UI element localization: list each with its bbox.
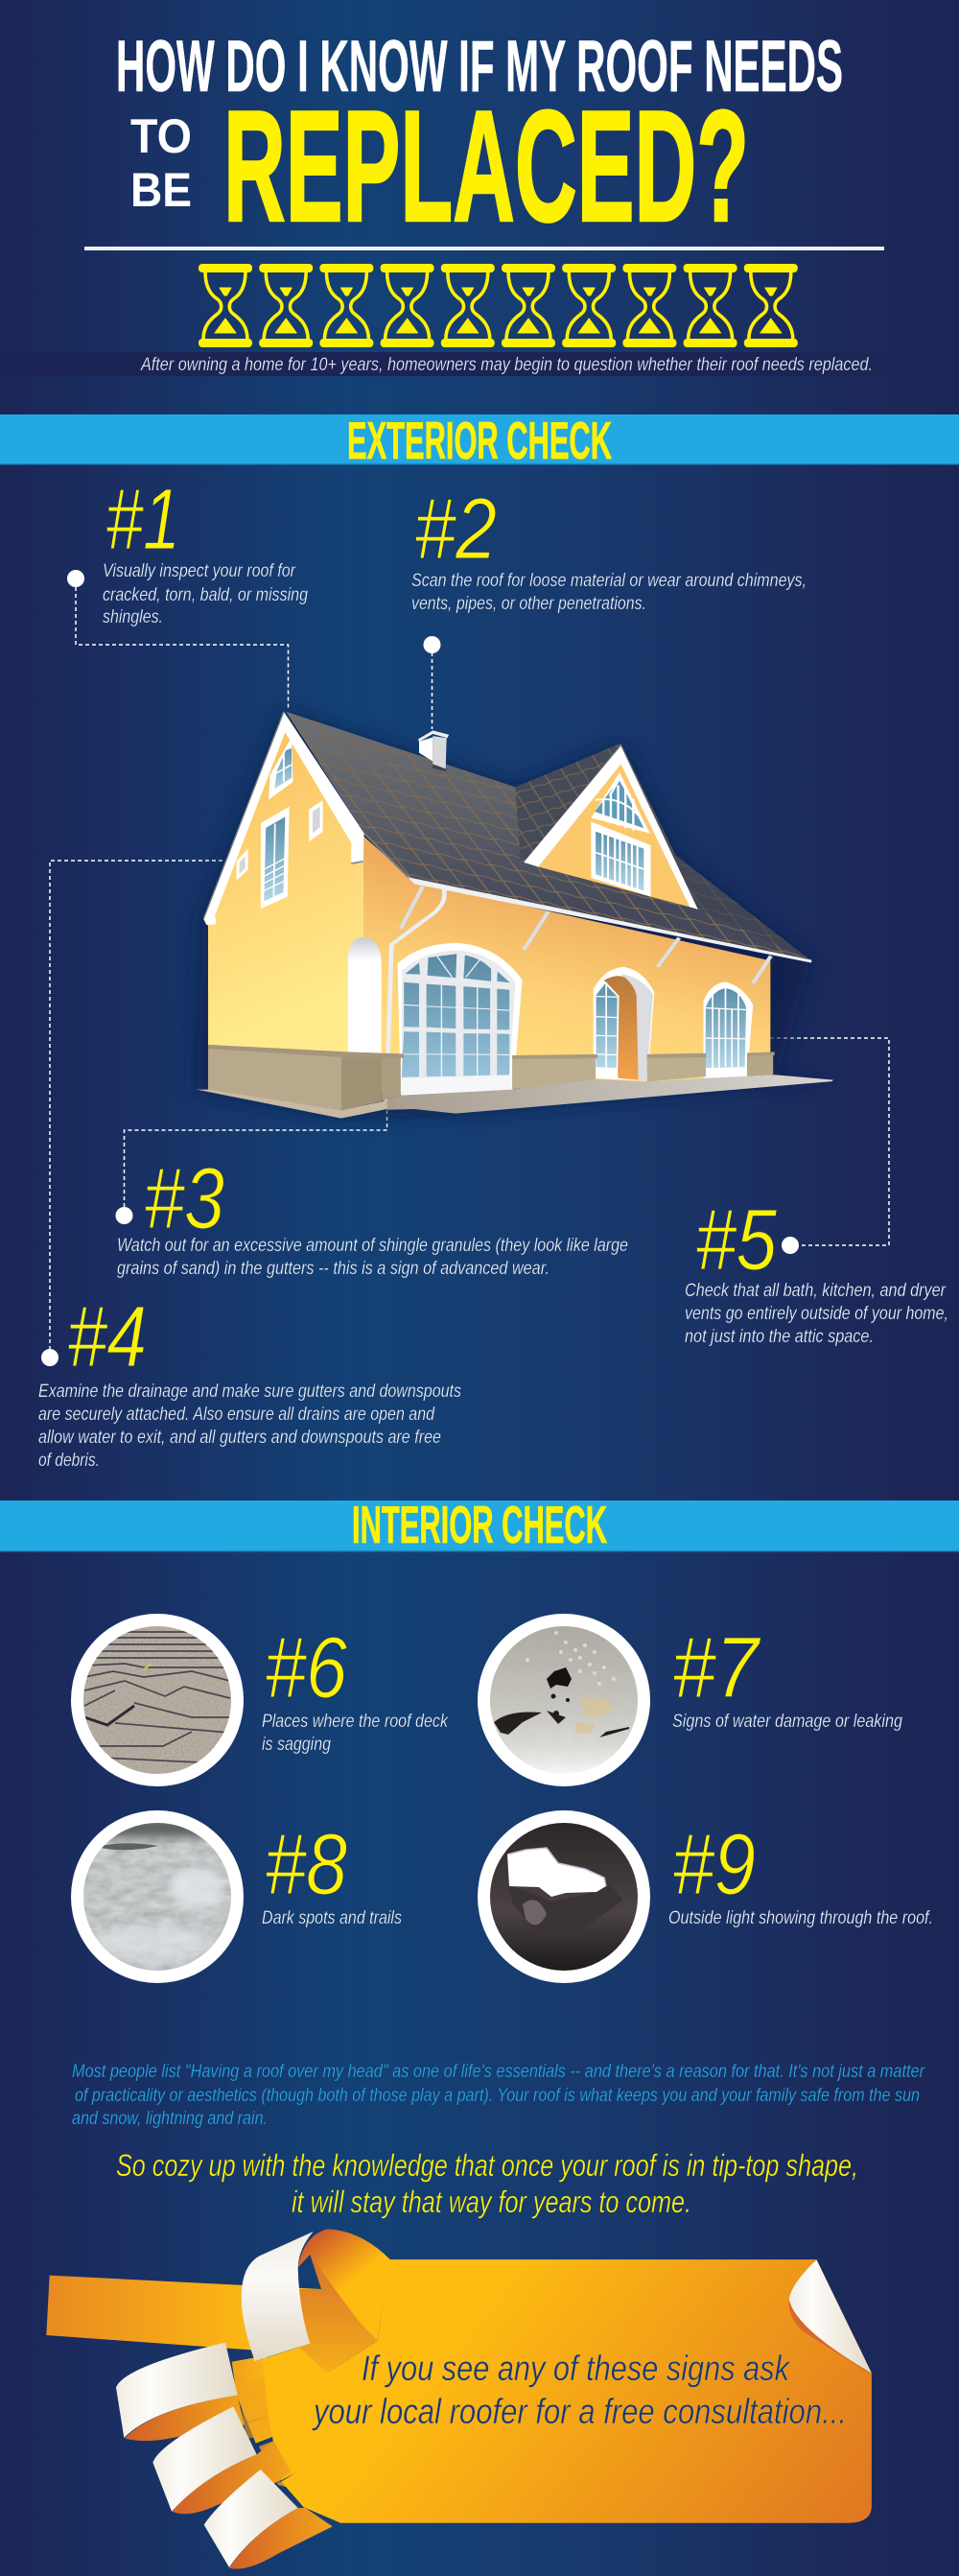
- left wall: [208, 727, 364, 1056]
- point 4: of debris.: [38, 1450, 100, 1471]
- ribbon corner curl: [789, 2259, 872, 2375]
- number and text 6: is sagging: [262, 1734, 331, 1755]
- right arched window: [704, 982, 753, 1078]
- tall gable window with balcony: [261, 807, 290, 909]
- point 2: [411, 482, 807, 653]
- title: BE: [130, 163, 192, 217]
- brackets and downspout: [386, 877, 811, 1102]
- ribbon banner body and corner curl: [259, 2259, 872, 2523]
- ribbon paper fold 1: [116, 2343, 238, 2438]
- number and text 8: #8: [265, 1817, 347, 1913]
- leader line 5: [770, 1038, 889, 1245]
- ribbon paper fold top: [242, 2232, 314, 2361]
- ribbon fold 1 underside: [125, 2396, 245, 2441]
- ribbon call to action: If you see any of these signs ask: [362, 2349, 791, 2388]
- main roof: [286, 712, 811, 960]
- photo 8: dark spots: [71, 1810, 244, 1983]
- point 1: Visually inspect your roof for: [103, 560, 296, 581]
- number and text 9: #9: [672, 1817, 756, 1913]
- front wall: [364, 837, 770, 1094]
- ribbon slivers: [244, 2415, 295, 2483]
- point 3: grains of sand) in the gutters -- this is a sign of advanced wear.: [117, 1258, 550, 1279]
- ribbon fold 3 underside: [229, 2508, 333, 2569]
- point 5: #5: [695, 1193, 778, 1288]
- point 2: #2: [414, 482, 497, 578]
- point 3: #3: [144, 1151, 224, 1247]
- entry door arch: [594, 967, 654, 1080]
- photo 9: light through roof: [478, 1810, 650, 1983]
- ribbon left folds: [46, 2229, 390, 2569]
- point 1: [67, 472, 308, 627]
- point 5: [685, 1193, 948, 1347]
- banner: exterior check: EXTERIOR CHECK: [347, 411, 612, 470]
- number and text 7: #7: [672, 1620, 761, 1716]
- ribbon call to action: your local roofer for a free consultation...: [311, 2392, 847, 2431]
- icon: row of ten hourglasses: [199, 264, 798, 347]
- arched side recess: [348, 937, 382, 1054]
- number and text 6: [262, 1620, 449, 1755]
- house shadow: [197, 712, 831, 1119]
- point 4: [38, 1289, 461, 1471]
- number and text 6: #6: [265, 1620, 348, 1716]
- leader line 4: [50, 861, 236, 1350]
- point 2: vents, pipes, or other penetrations.: [411, 593, 646, 614]
- point 5: not just into the attic space.: [685, 1326, 874, 1347]
- ribbon fold 2 underside: [172, 2441, 291, 2514]
- chimney: [418, 730, 449, 771]
- closing yellow statement: [116, 2148, 858, 2219]
- point 2: Scan the roof for loose material or wear around chimneys,: [411, 570, 807, 591]
- number and text 7: Signs of water damage or leaking: [672, 1711, 902, 1732]
- house illustration: [197, 712, 833, 1119]
- banner: exterior check: [0, 411, 959, 470]
- ribbon paper fold 3: [204, 2470, 298, 2567]
- stone base: [208, 1045, 775, 1110]
- point 4: Examine the drainage and make sure gutters and downspouts: [38, 1381, 461, 1402]
- ribbon paper fold 2: [152, 2406, 257, 2512]
- ribbon inner fold pieces: [232, 2357, 304, 2507]
- number and text 7: [672, 1620, 902, 1732]
- title: [116, 26, 843, 254]
- point 3: Watch out for an excessive amount of shingle granules (they look like large: [117, 1235, 628, 1256]
- dormer gable: [524, 745, 698, 910]
- ribbon top loop: [298, 2229, 390, 2341]
- ground slab: [197, 1075, 833, 1119]
- point 4: are securely attached. Also ensure all drains are open and: [38, 1404, 435, 1425]
- ribbon call to action: [311, 2349, 847, 2431]
- title: TO: [130, 109, 192, 163]
- number and text 9: [668, 1817, 933, 1928]
- small gable windows: [237, 800, 323, 880]
- banner: interior check: [0, 1495, 959, 1554]
- banner: interior check: INTERIOR CHECK: [352, 1495, 607, 1554]
- ribbon left strip: [46, 2276, 321, 2350]
- big arched window: [397, 943, 523, 1096]
- photo 7: water damage: [478, 1614, 650, 1786]
- point 1: cracked, torn, bald, or missing: [103, 584, 308, 605]
- leader line 2: [432, 652, 433, 729]
- gable top window: [269, 738, 292, 800]
- point 1: #1: [105, 472, 180, 568]
- dormer arched window: [591, 772, 650, 834]
- leader line 3: [125, 1103, 387, 1207]
- dormer lower window: [591, 821, 651, 897]
- left bargeboard trim: [203, 712, 364, 925]
- ribbon main body: [259, 2259, 872, 2523]
- photo 6: sagging shingles: [71, 1614, 244, 1786]
- closing paragraph: [72, 2061, 925, 2129]
- point 4: #4: [67, 1289, 147, 1385]
- closing yellow statement: it will stay that way for years to come.: [292, 2185, 691, 2219]
- number and text 8: Dark spots and trails: [262, 1907, 402, 1928]
- ribbon darker band: [295, 2255, 377, 2373]
- leader line 1: [76, 587, 288, 710]
- closing paragraph: and snow, lightning and rain.: [72, 2108, 268, 2129]
- number and text 8: [262, 1817, 402, 1928]
- point 1: shingles.: [103, 606, 163, 627]
- point 3: [115, 1151, 628, 1279]
- number and text 6: Places where the roof deck: [262, 1711, 449, 1732]
- point 4: allow water to exit, and all gutters and downspouts are free: [38, 1427, 441, 1448]
